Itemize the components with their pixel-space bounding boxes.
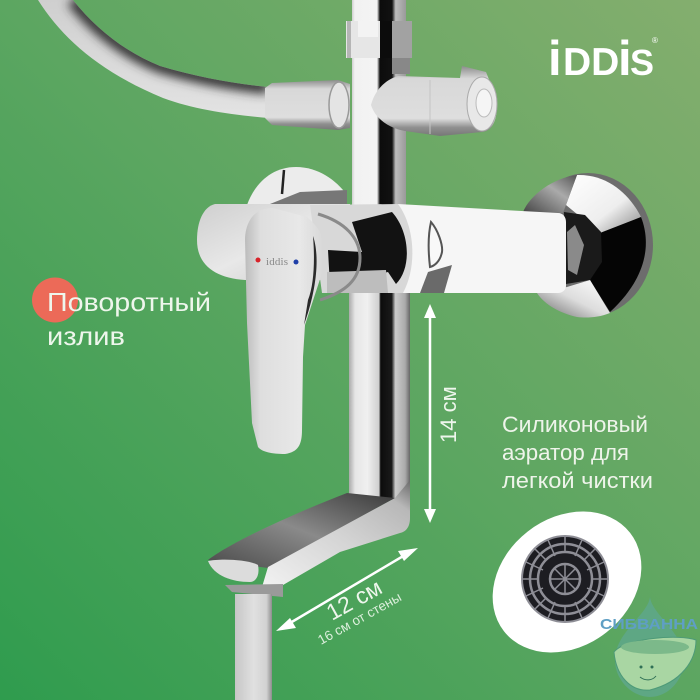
hand shower holder knob [371, 66, 497, 136]
height label: 14 см [436, 386, 461, 443]
logo: i [548, 32, 562, 86]
width arrow [276, 548, 418, 631]
aerator photo [465, 482, 669, 682]
faucet body right [398, 204, 566, 293]
callout: swivel spout: излив [47, 321, 125, 351]
highlight circle [32, 278, 78, 322]
spout [208, 480, 410, 597]
faucet body left [197, 204, 350, 280]
callout: silicone aerator: Силиконовый [502, 412, 648, 437]
central mixer chrome [310, 204, 412, 300]
right wall flange [523, 173, 653, 318]
logo: i [618, 32, 632, 86]
callout: silicone aerator: легкой чистки [502, 468, 653, 493]
wall distance label: 16 см от стены [315, 589, 404, 648]
watermark: СИБВАННА [600, 616, 698, 633]
logo [548, 32, 658, 86]
callout: silicone aerator: аэратор для [502, 440, 629, 465]
width label: 12 см [322, 574, 386, 625]
shower rail pole [346, 0, 412, 205]
hose connector [265, 80, 350, 130]
shower hose [38, 0, 267, 118]
left wall flange [247, 167, 347, 205]
logo: DD [563, 41, 619, 84]
logo: S [630, 42, 654, 83]
hot dot [256, 258, 260, 262]
logo: ® [652, 36, 658, 45]
callout: swivel spout [47, 287, 211, 351]
callout: swivel spout: Поворотный [47, 287, 211, 317]
watermark [600, 597, 698, 697]
cold dot [294, 260, 298, 264]
height arrow [424, 304, 436, 523]
lever handle [245, 208, 323, 454]
water stream [235, 594, 272, 700]
callout: silicone aerator [502, 412, 653, 493]
lower spout riser [349, 293, 410, 500]
lever brand: iddis [266, 256, 288, 268]
